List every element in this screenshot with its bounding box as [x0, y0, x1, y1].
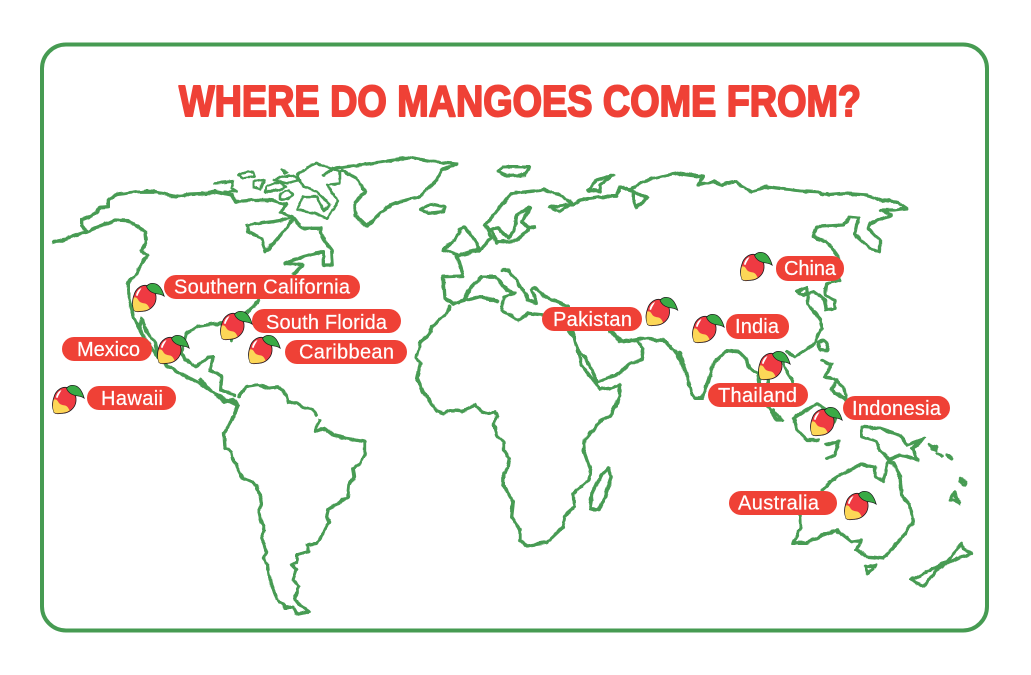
- label: Mexico: Mexico: [77, 339, 140, 361]
- icon: mango Caribbean: [248, 335, 280, 364]
- label: Pakistan: Pakistan: [553, 309, 632, 331]
- label: Hawaii: Hawaii: [101, 388, 163, 410]
- label: China: China: [784, 258, 837, 280]
- map: Africa and Arabia: [417, 307, 643, 546]
- icon: mango India: [692, 314, 724, 343]
- world map: [53, 157, 972, 614]
- icon: mango Indonesia: [810, 407, 842, 436]
- icon: mango Southern California: [132, 283, 164, 312]
- map: Greenland: [323, 157, 457, 226]
- label: India: [726, 314, 789, 339]
- map: North America: [53, 157, 457, 420]
- icon: mango Mexico: [158, 335, 189, 364]
- icon: mango China: [740, 252, 772, 281]
- panel: rounded green frame: [42, 44, 987, 630]
- label: Southern California: Southern California: [174, 276, 351, 298]
- title: WHERE DO MANGOES COME FROM?: [179, 77, 861, 126]
- label: Caribbean: Caribbean: [299, 342, 394, 364]
- map: South America: [200, 379, 365, 614]
- label: China: [776, 256, 844, 281]
- label: Hawaii: [87, 386, 176, 410]
- icon: mango Pakistan: [646, 297, 678, 326]
- label: Australia: Australia: [738, 492, 820, 514]
- label: South Florida: South Florida: [266, 312, 388, 334]
- label: India: India: [735, 316, 780, 338]
- map: Europe and northern Asia: [421, 167, 700, 370]
- label: Indonesia: Indonesia: [852, 398, 942, 420]
- label: Australia: [729, 491, 837, 515]
- icon: mango Hawaii: [52, 385, 84, 414]
- icon: mango Australia: [844, 491, 876, 520]
- label: Mexico: [62, 337, 152, 361]
- map: Asia east coast, Southeast Asia and Oceania: [680, 173, 972, 587]
- label: Thailand: Thailand: [718, 385, 797, 407]
- icon: mango Thailand: [758, 351, 790, 380]
- icon: mango South Florida: [220, 311, 252, 340]
